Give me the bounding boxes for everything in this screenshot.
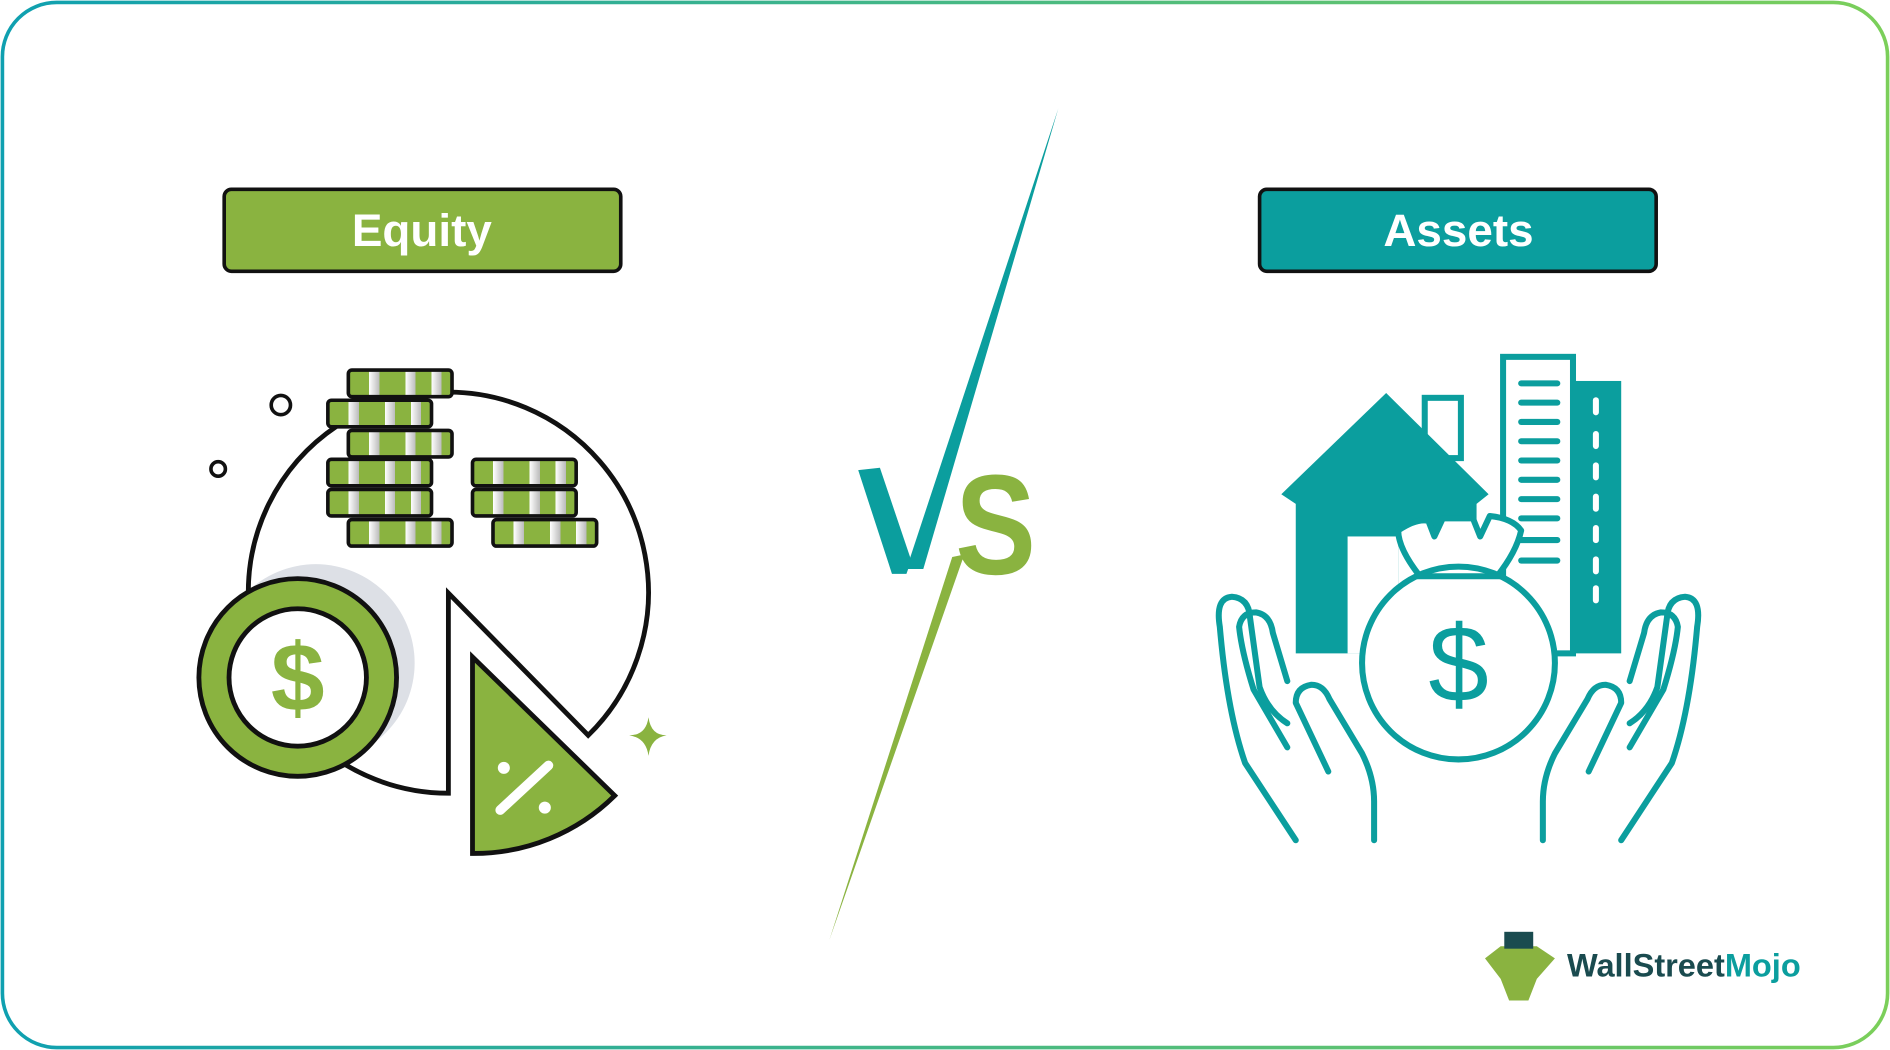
heading: Assets: Assets bbox=[1383, 205, 1534, 256]
logo: WallStreetMojo: WallStreetMojo bbox=[1567, 947, 1801, 983]
logo: WallStreetMojo bbox=[1485, 932, 1801, 1001]
icon: equity pie with coins bbox=[199, 370, 667, 853]
VS divider bbox=[829, 109, 1058, 940]
icon: assets house, buildings, money bag and hands bbox=[1219, 357, 1698, 840]
VS divider: S bbox=[955, 446, 1036, 604]
heading: Equity bbox=[224, 189, 621, 271]
icon: equity pie with coins: $ bbox=[271, 625, 325, 732]
icon: assets house, buildings, money bag and hands: $ bbox=[1428, 604, 1489, 725]
heading: Equity: Equity bbox=[352, 205, 492, 256]
heading: Assets bbox=[1260, 189, 1656, 271]
